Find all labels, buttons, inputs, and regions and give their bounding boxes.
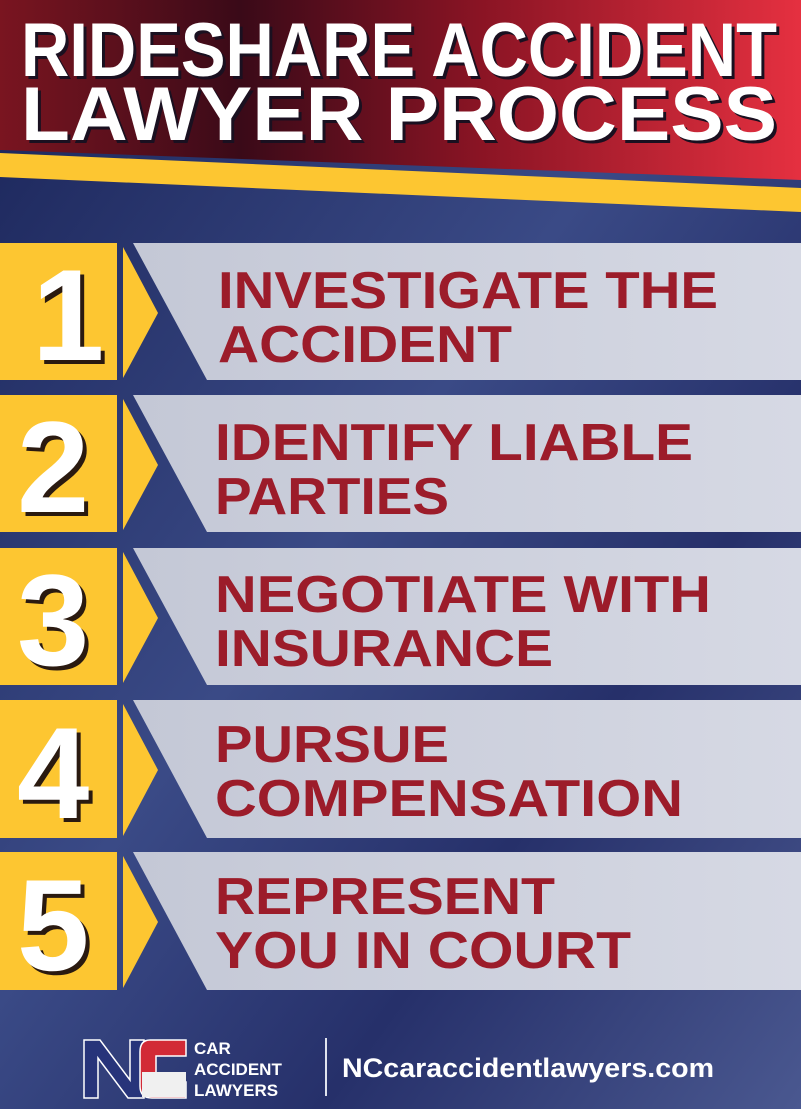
step 4: 4 — [21, 704, 93, 850]
step 5: 5 — [21, 856, 93, 1002]
step 4 — [0, 700, 801, 850]
step 1: INVESTIGATE THE — [218, 262, 718, 320]
step 2: 2 — [21, 398, 93, 544]
step 1: ACCIDENT — [218, 316, 512, 374]
footer logo: ACCIDENT — [194, 1060, 282, 1079]
step 1: 1 — [32, 242, 104, 388]
step 2: 2 — [17, 394, 89, 540]
footer logo: LAWYERS — [194, 1081, 278, 1100]
step 3: 3 — [21, 551, 93, 697]
step 4: PURSUE — [215, 716, 449, 774]
title: LAWYER PROCESS — [21, 72, 777, 157]
step 3: 3 — [17, 547, 89, 693]
step 5: YOU IN COURT — [215, 922, 631, 980]
website url: NCcaraccidentlawyers.com — [342, 1053, 714, 1083]
title — [21, 8, 780, 160]
step 2: IDENTIFY LIABLE — [215, 414, 693, 472]
step 2 — [0, 394, 801, 544]
step 5: REPRESENT — [215, 868, 555, 926]
step 5: 5 — [17, 852, 89, 998]
title: LAWYER PROCESS — [24, 75, 780, 160]
step 1 — [0, 242, 801, 392]
step 5 — [0, 852, 801, 1002]
step 4: 4 — [17, 700, 89, 846]
step 3: INSURANCE — [215, 620, 553, 678]
step 3 — [0, 547, 801, 697]
yellow band — [0, 153, 801, 212]
step 3: NEGOTIATE WITH — [215, 566, 711, 624]
step 2: PARTIES — [215, 468, 449, 526]
header background — [0, 0, 801, 180]
step 1: 1 — [36, 246, 108, 392]
step 4: COMPENSATION — [215, 770, 683, 828]
footer logo: CAR — [194, 1039, 231, 1058]
footer logo — [84, 1039, 282, 1100]
